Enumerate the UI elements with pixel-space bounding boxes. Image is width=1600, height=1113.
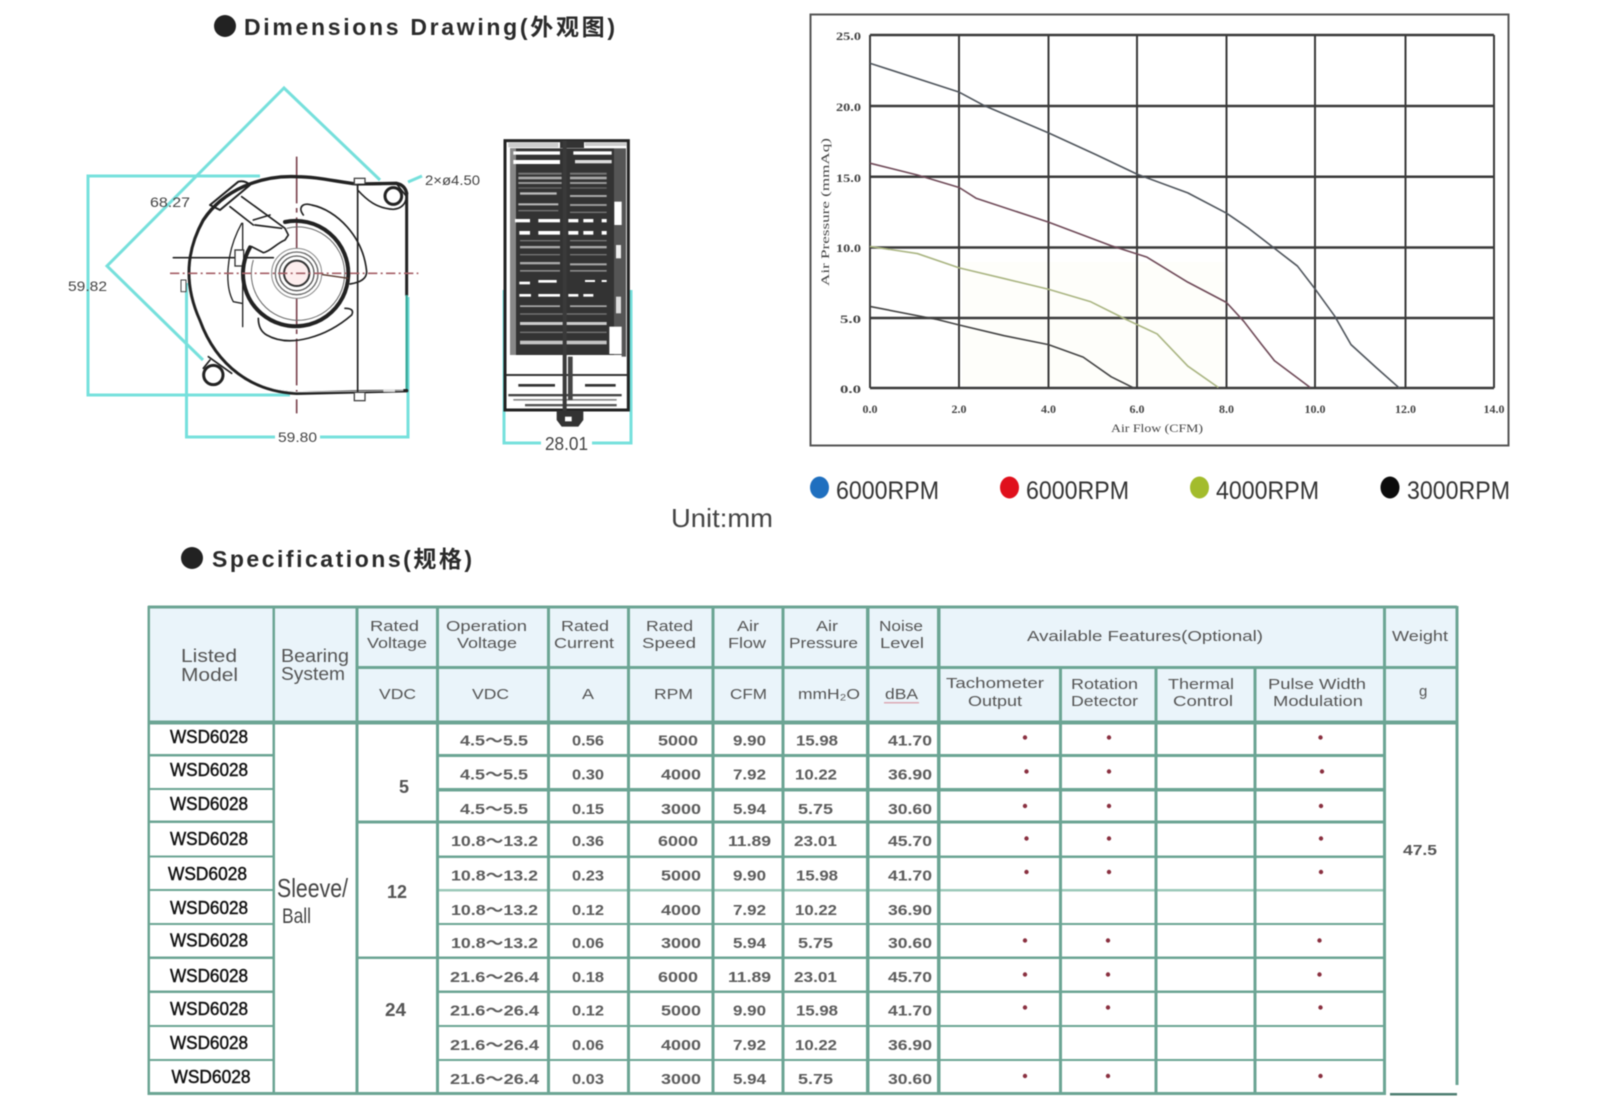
table row 8: WSD6028	[170, 966, 248, 986]
dimension label: 28.01: 28.01	[545, 434, 588, 454]
table row 1: 0.56	[572, 732, 604, 750]
table row 1: 41.70	[888, 732, 932, 750]
x axis labels	[862, 402, 1504, 416]
chart frame	[810, 14, 1508, 446]
table row 6: 10.22	[795, 902, 837, 919]
heading: dimensions drawing: Dimensions Drawing(外观图)	[244, 14, 615, 40]
blades	[301, 204, 367, 284]
table row 1: 5000	[658, 732, 698, 750]
table row 1: 9.90	[733, 732, 766, 750]
table header: bearing system: Bearing	[281, 646, 349, 666]
table row 10: 36.90	[888, 1037, 932, 1054]
dimension label: 68.27: 68.27	[150, 194, 190, 210]
table row 5: 0.23	[572, 868, 604, 884]
table units row: Thermal	[1168, 676, 1234, 693]
table units row: Rotation	[1071, 676, 1138, 693]
table row 11: 5.75	[798, 1071, 833, 1088]
dimension label: hole diameter: 2×ø4.50	[425, 172, 480, 188]
y axis labels: 15.0	[836, 171, 861, 185]
y axis title: Air Pressure (mmAq)	[818, 138, 832, 286]
table header: operation voltage	[446, 618, 527, 652]
table row 9: 15.98	[796, 1002, 838, 1020]
table header: rated speed: Rated	[646, 618, 693, 635]
table header: rated voltage	[367, 618, 427, 652]
table row 1: 4.5～5.5	[460, 732, 528, 750]
table row 3	[170, 794, 932, 818]
table row 3: 5.94	[733, 801, 767, 818]
table row 5: 10.8～13.2	[451, 868, 538, 884]
curve: 6000 rpm blue	[870, 63, 1399, 388]
table row 3: 30.60	[888, 801, 932, 818]
table row 1: 15.98	[796, 732, 838, 750]
table row 10: 10.22	[795, 1037, 837, 1054]
table row 2: 10.22	[795, 766, 837, 784]
table row 10	[170, 1033, 932, 1054]
table header: operation voltage: Voltage	[457, 635, 517, 652]
table row 2: 7.92	[733, 766, 766, 784]
table row 11: 21.6～26.4	[450, 1071, 540, 1088]
table row 7: 5.75	[798, 935, 833, 952]
table units row: mmH₂O	[798, 686, 860, 703]
table header: rated voltage: Rated	[370, 618, 419, 635]
table header: rated current: Rated	[561, 618, 609, 635]
legend item: blue 6000RPM: 6000RPM	[836, 477, 939, 505]
table units row: g	[1419, 683, 1427, 700]
table row 2: 36.90	[888, 766, 932, 784]
table row 6: WSD6028	[170, 898, 248, 918]
table header: air flow	[728, 618, 766, 652]
table row 4: WSD6028	[170, 829, 248, 849]
table header: listed model: Model	[181, 665, 238, 685]
table row 8: 21.6～26.4	[450, 969, 540, 986]
table row 8: 6000	[658, 969, 698, 986]
table row 5	[168, 864, 932, 884]
table row 7: 0.06	[572, 935, 604, 952]
table units row: RPM	[654, 686, 693, 703]
table units row: VDC	[379, 686, 416, 703]
table header: rated voltage: Voltage	[367, 635, 427, 652]
dimension lines: 28.01	[504, 290, 631, 443]
table row 1	[170, 727, 932, 750]
table row 4: 11.89	[728, 833, 771, 850]
table row 9: 0.12	[572, 1002, 604, 1020]
table units row: A	[582, 686, 594, 703]
diagram: fan side view	[504, 141, 631, 454]
table row 11: 0.03	[572, 1071, 604, 1088]
legend	[810, 476, 1510, 505]
table row 6: 36.90	[888, 902, 932, 919]
table row 2: 4000	[661, 766, 701, 784]
y axis labels	[836, 29, 861, 396]
y axis labels: 0.0	[840, 382, 861, 396]
merged cell: voltage 5: 5	[399, 777, 409, 797]
table header: air flow: Air	[737, 618, 759, 635]
table header: available features: Available Features(Optional)	[1027, 628, 1263, 645]
merged cell: bearing type: Sleeve/	[277, 873, 349, 903]
side view drawing	[505, 141, 628, 427]
x axis title: Air Flow (CFM)	[1111, 421, 1203, 435]
table row 6: 10.8～13.2	[451, 902, 538, 919]
table row 10: 7.92	[733, 1037, 766, 1054]
table row 9	[170, 999, 932, 1020]
table header: air flow: Flow	[728, 635, 766, 652]
table header: bearing system	[281, 646, 349, 684]
x axis labels: 6.0	[1130, 402, 1144, 416]
y axis labels: 20.0	[836, 100, 861, 114]
table header: noise level	[879, 618, 924, 652]
chart grid	[870, 35, 1494, 388]
table row 3: 0.15	[572, 801, 604, 818]
table row 4: 10.8～13.2	[451, 833, 538, 850]
table row 8	[170, 966, 932, 986]
table row 11: 30.60	[888, 1071, 932, 1088]
table row 8: 0.18	[572, 969, 604, 986]
dimension label: 59.80: 59.80	[278, 429, 317, 445]
table header: weight: Weight	[1392, 628, 1449, 645]
table header: noise level: Noise	[879, 618, 923, 635]
table header: operation voltage: Operation	[446, 618, 527, 635]
table row 10: 21.6～26.4	[450, 1037, 540, 1054]
table units row: VDC	[472, 686, 509, 703]
table header: noise level: Level	[880, 635, 924, 652]
table header: bearing system: System	[281, 664, 345, 684]
table units row: Pulse Width	[1268, 676, 1366, 693]
y axis labels: 5.0	[840, 312, 861, 326]
table row 5: 41.70	[888, 868, 932, 884]
legend item: red 6000RPM: 6000RPM	[1026, 477, 1129, 505]
table units row	[379, 675, 1427, 710]
table row 1: WSD6028	[170, 727, 248, 747]
table row 8: 11.89	[728, 969, 771, 986]
x axis labels: 14.0	[1484, 402, 1504, 416]
table units row: Modulation	[1273, 693, 1363, 710]
table row 9: 21.6～26.4	[450, 1002, 540, 1020]
table units row: Detector	[1071, 693, 1138, 710]
table units row: CFM	[730, 686, 767, 703]
x axis labels: 0.0	[862, 402, 878, 416]
table row 4	[170, 829, 932, 850]
table row 2: WSD6028	[170, 760, 248, 780]
table row 9: 41.70	[888, 1002, 932, 1020]
table row 5: WSD6028	[168, 864, 247, 884]
table row 11: 3000	[661, 1071, 701, 1088]
table row 3: 4.5～5.5	[460, 801, 528, 818]
x axis labels: 4.0	[1041, 402, 1056, 416]
table row 6	[170, 898, 932, 919]
table header: air pressure: Pressure	[789, 635, 858, 652]
table row 7: 10.8～13.2	[451, 935, 538, 952]
table row 10: WSD6028	[170, 1033, 248, 1053]
table row 10: 0.06	[572, 1037, 604, 1054]
x axis labels: 12.0	[1395, 402, 1416, 416]
table row 4: 45.70	[888, 833, 932, 850]
y axis labels: 25.0	[836, 29, 861, 43]
table header: listed model	[181, 646, 238, 685]
table row 3: WSD6028	[170, 794, 248, 814]
merged cell: weight value: 47.5	[1403, 842, 1437, 859]
x axis labels: 10.0	[1304, 402, 1326, 416]
legend item: black 3000RPM: 3000RPM	[1407, 477, 1510, 505]
legend item: green 4000RPM: 4000RPM	[1216, 477, 1319, 505]
table row 11: 5.94	[733, 1071, 767, 1088]
table row 2: 0.30	[572, 766, 604, 784]
table row 9: WSD6028	[170, 999, 248, 1019]
curve: 3000 rpm black	[870, 306, 1134, 388]
table units row: Tachometer	[946, 675, 1044, 692]
x axis labels: 2.0	[952, 402, 966, 416]
curve: 6000 rpm red	[870, 163, 1310, 387]
table units row: Output	[968, 693, 1023, 710]
table grid	[148, 606, 1458, 1096]
dimension label: 59.82: 59.82	[68, 278, 107, 294]
table row 11: WSD6028	[172, 1067, 250, 1087]
merged cell: bearing type: Ball	[282, 905, 311, 928]
table row 6: 4000	[661, 902, 701, 919]
table row 8: 45.70	[888, 969, 932, 986]
chart curves	[870, 63, 1399, 388]
table header: rated current	[554, 618, 615, 652]
feature availability markers	[1023, 735, 1324, 1078]
table row 10: 4000	[661, 1037, 701, 1054]
table row 6: 0.12	[572, 902, 604, 919]
heading: specifications: Specifications(规格)	[212, 546, 472, 572]
curve: 4000 rpm green	[870, 246, 1218, 387]
table row 4: 0.36	[572, 833, 604, 850]
table row 7: 5.94	[733, 935, 767, 952]
table units row: Control	[1173, 693, 1233, 710]
table header: rated speed	[642, 618, 696, 652]
table header: air pressure: Air	[816, 618, 838, 635]
chart: air pressure vs air flow	[810, 14, 1508, 446]
merged cell: bearing type	[277, 873, 349, 928]
table row 8: 23.01	[794, 969, 837, 986]
table header background	[149, 607, 1457, 722]
table header: air pressure	[789, 618, 858, 652]
table row 7	[170, 930, 932, 952]
y axis labels: 10.0	[836, 241, 861, 255]
table header: rated current: Current	[554, 635, 615, 652]
merged cell: voltage 24: 24	[385, 1000, 406, 1020]
table row 4: 23.01	[794, 833, 837, 850]
fan outline drawing	[170, 157, 418, 413]
table row 7: 30.60	[888, 935, 932, 952]
table row 11	[172, 1067, 932, 1088]
table row 2	[170, 760, 932, 784]
table row 7: 3000	[661, 935, 701, 952]
table units row: dBA	[885, 686, 918, 703]
table row 6: 7.92	[733, 902, 766, 919]
table row 3: 3000	[661, 801, 701, 818]
table row 4: 6000	[658, 833, 698, 850]
table header: rated speed: Speed	[642, 635, 696, 652]
table row 3: 5.75	[798, 801, 833, 818]
table row 9: 5000	[661, 1002, 701, 1020]
table row 5: 5000	[661, 868, 701, 884]
merged cell: voltage 12: 12	[387, 882, 407, 902]
table header: listed model: Listed	[181, 646, 237, 666]
unit note: Unit:mm	[671, 503, 773, 533]
table row 9: 9.90	[733, 1002, 766, 1020]
table row 5: 15.98	[796, 868, 838, 884]
x axis labels: 8.0	[1219, 402, 1234, 416]
table row 2: 4.5～5.5	[460, 766, 528, 784]
specifications table	[148, 606, 1458, 1096]
diagram: fan front view with dimensions	[68, 88, 480, 445]
table row 5: 9.90	[733, 868, 766, 884]
table row 7: WSD6028	[170, 930, 248, 950]
dimension lines	[88, 88, 422, 437]
